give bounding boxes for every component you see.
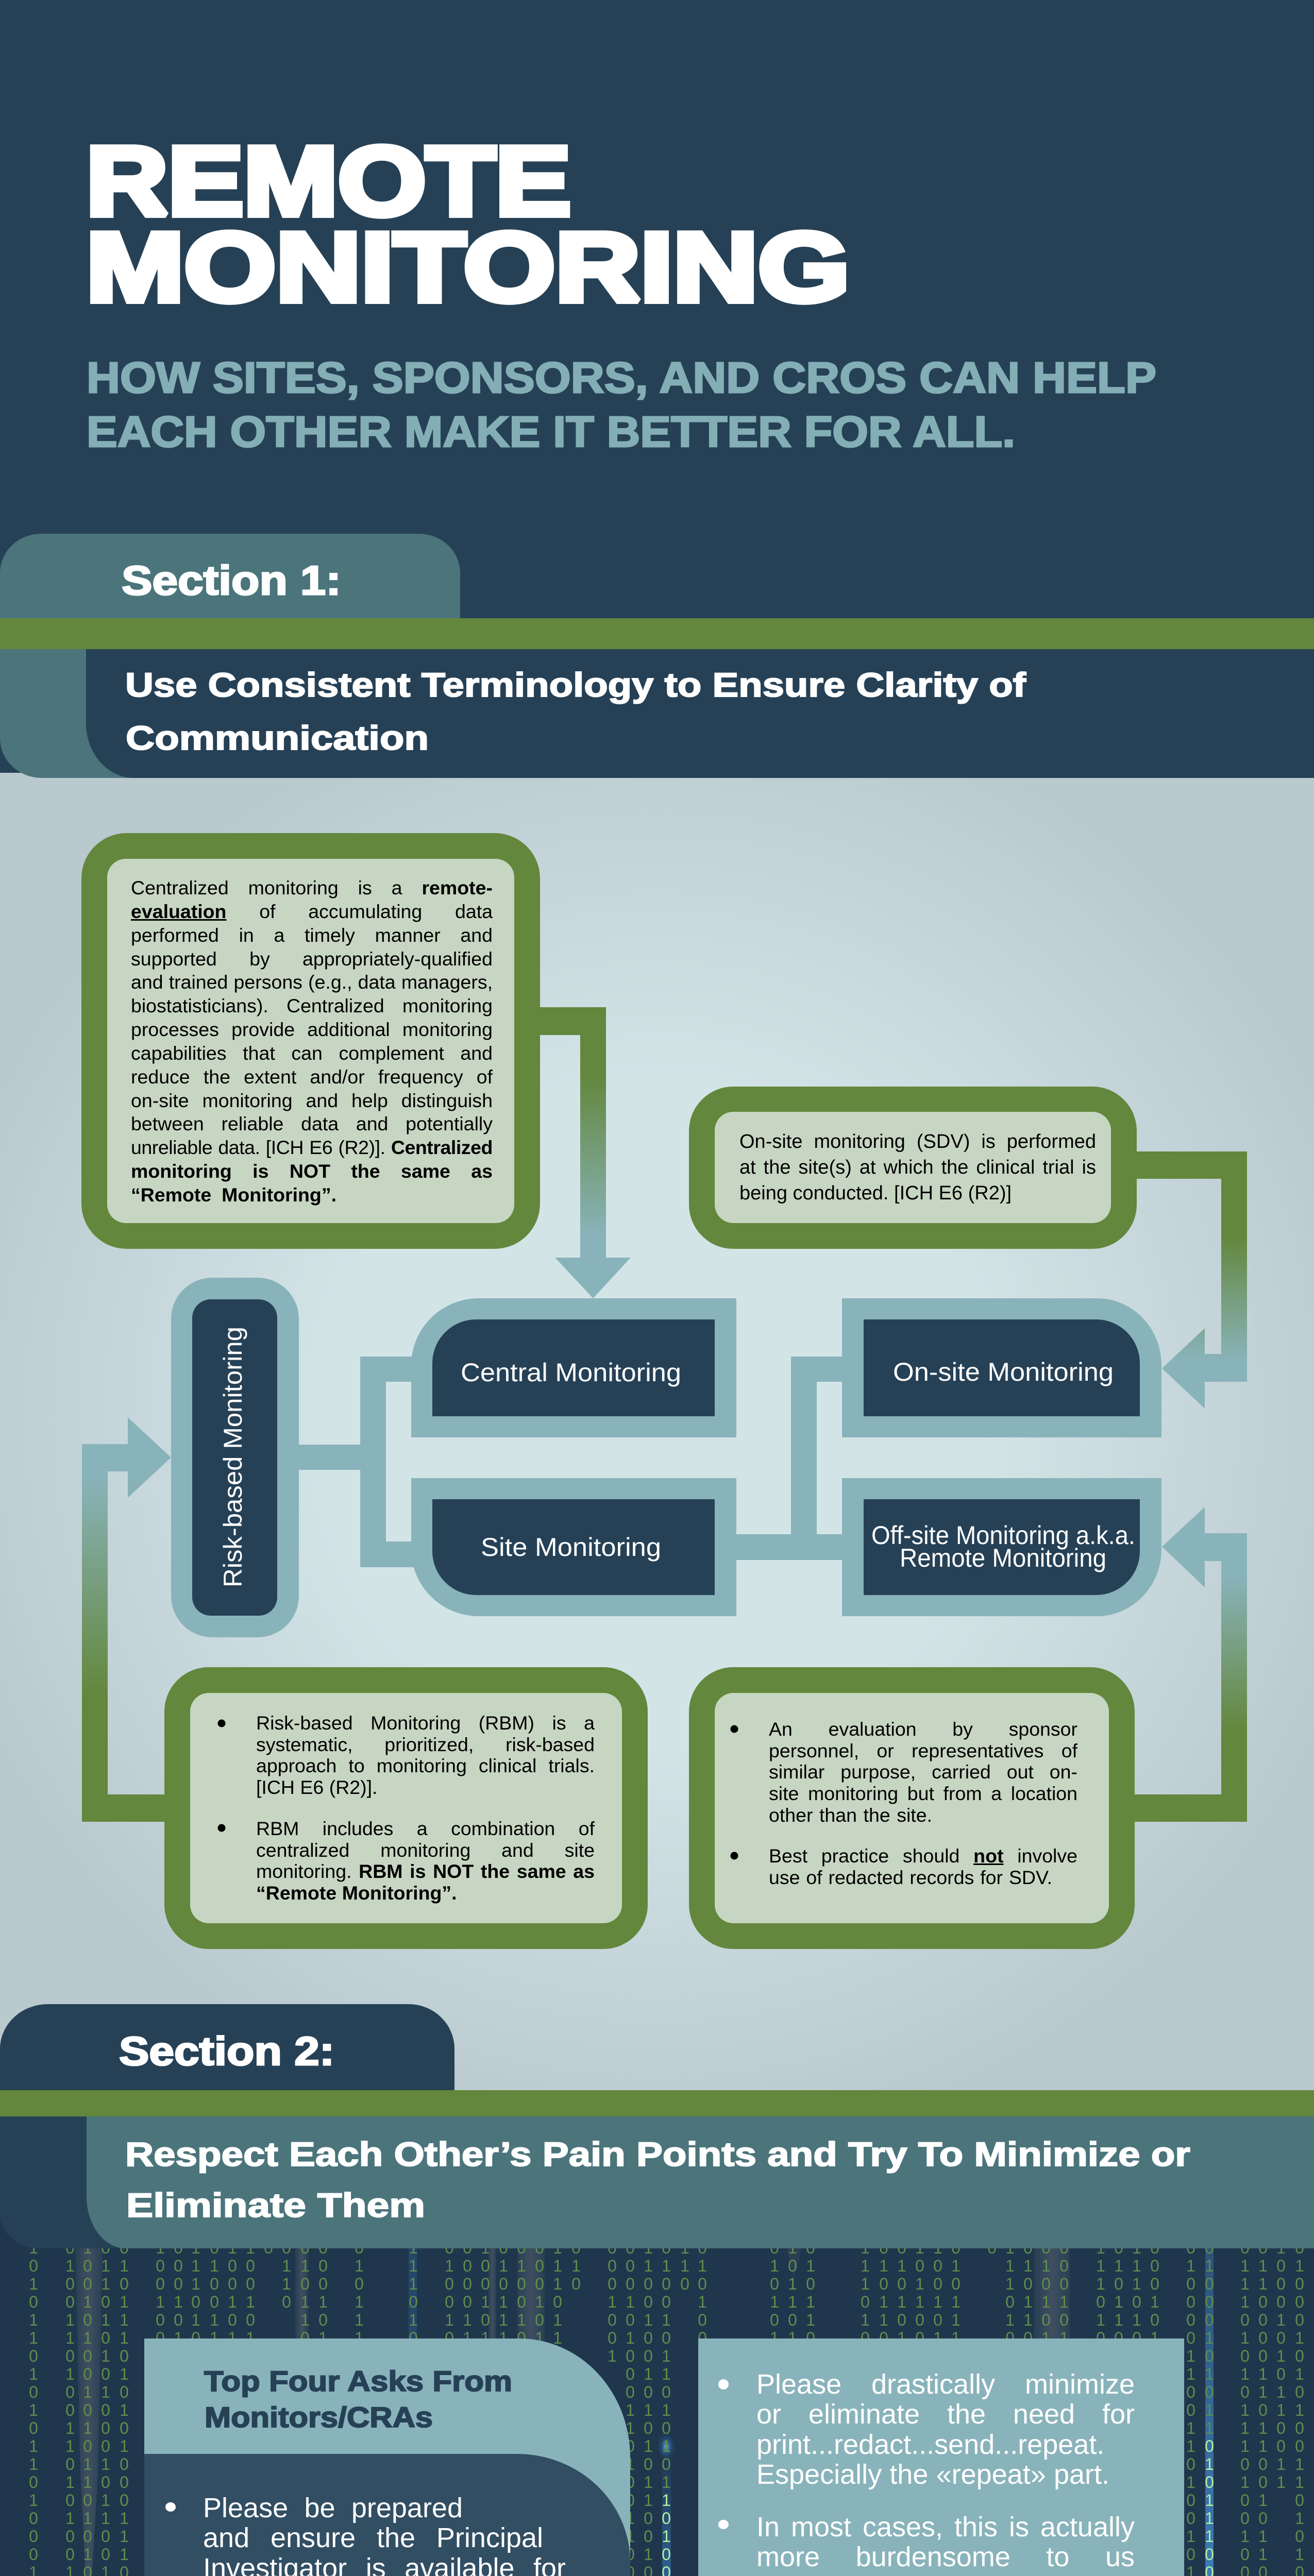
section 1 heading panel (86, 649, 1314, 778)
binary matrix background: 1011001 (915, 2239, 924, 2365)
binary matrix background: 0001010001101001100 (626, 2239, 635, 2576)
connector lines: left tree (296, 1357, 417, 1567)
panel: off-site monitoring definition: other than the site. (769, 1804, 932, 1826)
node: central monitoring (411, 1298, 736, 1437)
panel: centralized monitoring definition: biostatisticians). Centralized monitoring (131, 995, 493, 1016)
panel: centralized monitoring definition: supported by appropriately-qualified (131, 948, 493, 970)
section 1 header (0, 534, 1314, 778)
panel: centralized monitoring definition: processes provide additional monitoring (131, 1019, 493, 1040)
binary matrix background: 0001010 (1059, 2239, 1069, 2365)
node: on-site monitoring: On-site Monitoring (893, 1358, 1114, 1386)
binary matrix background: 0 (987, 2239, 997, 2257)
arrow: centralized note to central monitoring (536, 1007, 631, 1298)
node: site monitoring: Site Monitoring (481, 1533, 661, 1562)
node: on-site monitoring (842, 1298, 1161, 1437)
monitors card body (144, 2454, 630, 2576)
section 1 divider bar (0, 618, 1314, 649)
binary matrix background: 010 (571, 2239, 581, 2293)
binary matrix background: 1001011 (228, 2239, 237, 2365)
node: off-site monitoring: Off-site Monitoring a.k.a. (871, 1521, 1135, 1550)
binary matrix background: 0101101 (1023, 2239, 1033, 2365)
node: off-site monitoring: Remote Monitoring (900, 1544, 1106, 1572)
binary matrix background: 1001010010101101010 (83, 2239, 92, 2576)
sites list text: print...redact...send...repeat. (756, 2429, 1104, 2460)
binary matrix background: 01001011010101 (662, 2239, 671, 2492)
binary matrix background: 0100101 (517, 2239, 526, 2365)
monitors list text: Please be prepared (203, 2493, 463, 2523)
panel: top four asks from monitors (144, 2338, 630, 2576)
panel: centralized monitoring definition: “Remote Monitoring”. (131, 1184, 336, 1206)
binary matrix background: 0101110 (499, 2239, 508, 2365)
binary matrix background: 1110110 (553, 2239, 562, 2365)
monitors bullet marks (165, 2502, 176, 2576)
panel: off-site monitoring definition: personnel, or representatives of (769, 1740, 1077, 1761)
monitors list text: and ensure the Principal (203, 2522, 543, 2553)
section 2 divider bar (0, 2090, 1314, 2116)
title: REMOTE (86, 127, 571, 236)
node: risk-based monitoring (171, 1278, 299, 1637)
binary matrix background: 0001011 (535, 2239, 544, 2365)
panel: risk-based monitoring definition: “Remote Monitoring”. (256, 1882, 457, 1904)
section 2 heading: Respect Each Other’s Pain Points and Try To Minimize or (125, 2135, 1190, 2173)
panel: centralized monitoring definition (81, 833, 540, 1249)
section 2 heading: Eliminate Them (126, 2186, 425, 2224)
arrow: on-site note to on-site monitoring (1133, 1151, 1247, 1409)
node: central monitoring: Central Monitoring (461, 1358, 681, 1387)
binary matrix background: 1110101 (191, 2239, 200, 2365)
subtitle: HOW SITES, SPONSORS, AND CROS CAN HELP (87, 353, 1156, 402)
monitors card heading: Monitors/CRAs (205, 2401, 433, 2433)
binary matrix background: 0101101 (1114, 2239, 1123, 2365)
sites list text: or eliminate the need for (756, 2399, 1135, 2430)
binary matrix background: 1001011 (481, 2239, 490, 2365)
node: risk-based monitoring: Risk-based Monitoring (218, 1327, 247, 1587)
panel: on-site monitoring definition: being conducted. [ICH E6 (R2)] (739, 1182, 1012, 1204)
binary matrix background: 0100101 (445, 2239, 454, 2365)
binary matrix background: 0001010 (174, 2239, 183, 2365)
title: MONITORING (86, 213, 850, 322)
section 1 label: Section 1: (122, 557, 341, 603)
panel: risk-based monitoring definition: Risk-based Monitoring (RBM) is a (256, 1713, 595, 1734)
sites list text: Especially the «repeat» part. (756, 2459, 1109, 2490)
top banner background (0, 0, 1314, 788)
node: site monitoring (411, 1478, 736, 1616)
monitors card heading: Top Four Asks From (204, 2365, 512, 2397)
panel: risk-based monitoring definition: [ICH E6 (R2)]. (256, 1776, 377, 1798)
binary matrix background: 0101101 (806, 2239, 815, 2365)
panel: risk-based monitoring definition (164, 1667, 648, 1949)
binary matrix background: 0 (264, 2239, 273, 2257)
panel: centralized monitoring definition: reduce the extent and/or frequency of (131, 1066, 493, 1088)
binary matrix background: 0101010 (770, 2239, 779, 2365)
sites list text: more burdensome to us (756, 2541, 1135, 2572)
binary matrix background: 0101010 (897, 2239, 906, 2365)
section 1 tab (0, 534, 460, 618)
binary matrix background: 1110101 (861, 2239, 870, 2365)
panel: centralized monitoring definition: evaluation of accumulating data (131, 901, 493, 922)
binary matrix background: 0101110 (951, 2239, 961, 2365)
section 1 heading: Use Consistent Terminology to Ensure Clarity of (125, 666, 1026, 704)
panel: off-site monitoring definition: An evaluation by sponsor (769, 1719, 1077, 1740)
node: off-site monitoring (842, 1478, 1161, 1616)
sites bullet marks (718, 2379, 729, 2576)
section 1 diagram backdrop (0, 773, 1314, 2123)
binary matrix background: 01000101011 (1205, 2239, 1214, 2437)
panel: centralized monitoring definition: capabilities that can complement and (131, 1042, 493, 1064)
binary matrix background: 10001010110011 (1276, 2239, 1286, 2492)
binary matrix background: 0101010 (1041, 2239, 1051, 2365)
panel: centralized monitoring definition: on-site monitoring and help distinguish (131, 1090, 493, 1111)
panel: risk-based monitoring definition: centralized monitoring and site (256, 1839, 595, 1861)
section 1 teal backing (0, 649, 206, 778)
binary matrix background: 1001010 (246, 2239, 255, 2365)
arrow: off-site note to off-site monitoring (1131, 1507, 1247, 1822)
binary matrix background: 010100101 (698, 2239, 707, 2401)
panel: off-site monitoring definition: use of redacted records for SDV. (769, 1867, 1052, 1888)
panel: risk-based monitoring definition: RBM includes a combination of (256, 1818, 595, 1839)
binary matrix background: 0110 (282, 2239, 291, 2311)
binary matrix background: 0001010 (1150, 2239, 1159, 2365)
panel: centralized monitoring definition: performed in a timely manner and (131, 924, 493, 946)
panel: on-site monitoring definition: On-site monitoring (SDV) is performed (739, 1131, 1096, 1153)
subtitle: EACH OTHER MAKE IT BETTER FOR ALL. (87, 408, 1015, 456)
panel: risk-based monitoring definition: approach to monitoring clinical trials. (256, 1755, 595, 1776)
binary matrix background: 0101100 (879, 2239, 888, 2365)
sites list text: Please drastically minimize (756, 2369, 1135, 2400)
binary matrix background: 1110101 (1096, 2239, 1105, 2365)
panel: top four asks from sites (698, 2338, 1184, 2576)
section 2 tab (0, 2004, 454, 2090)
binary matrix background: 100100 (156, 2239, 165, 2347)
binary matrix background: 0000110 (463, 2239, 472, 2365)
panel: centralized monitoring definition: between reliable data and potentially (131, 1113, 493, 1134)
panel: off-site monitoring definition: site monitoring but from a location (769, 1783, 1077, 1804)
title (86, 127, 850, 322)
panel: centralized monitoring definition: and trained persons (e.g., data managers, (131, 971, 493, 993)
panel: risk-based monitoring definition: monitoring. RBM is NOT the same as (256, 1860, 595, 1882)
sites list text (756, 2369, 1148, 2576)
section 2 dark backing (0, 2116, 206, 2248)
binary matrix background: 110 (680, 2239, 689, 2293)
panel: off-site monitoring definition (689, 1667, 1135, 1949)
panel: on-site monitoring definition: at the site(s) at which the clinical trial is (739, 1157, 1096, 1178)
monitors list text (203, 2493, 595, 2576)
section 2 label: Section 2: (119, 2028, 334, 2074)
binary matrix background: 0101100 (300, 2239, 310, 2365)
binary matrix background: 0001001 (608, 2239, 617, 2365)
binary matrix background: 1110101 (1132, 2239, 1141, 2365)
panel: centralized monitoring definition: unreliable data. [ICH E6 (R2)]. Centralized (131, 1137, 493, 1158)
binary matrix background: 0101110 (355, 2239, 364, 2365)
binary matrix background: 0001010 (318, 2239, 328, 2365)
arrow: RBM note to risk-based monitoring (82, 1417, 171, 1822)
panel: centralized monitoring definition: Centralized monitoring is a remote- (131, 877, 493, 899)
panel: off-site monitoring definition: similar purpose, carried out on- (769, 1761, 1077, 1783)
binary matrix background: 1011010 (788, 2239, 797, 2365)
subtitle (87, 353, 1156, 456)
section 2 heading panel (87, 2116, 1314, 2248)
panel: centralized monitoring definition: monitoring is NOT the same as (131, 1160, 493, 1182)
section 2 header (0, 2004, 1314, 2248)
sites card body (698, 2338, 1184, 2576)
section 1 heading: Communication (126, 719, 429, 757)
section 1 heading (125, 666, 1026, 757)
binary matrix background: 0100110 (210, 2239, 219, 2365)
panel: risk-based monitoring definition: systematic, prioritized, risk-based (256, 1734, 595, 1755)
section 2 heading (125, 2135, 1190, 2224)
connector lines: right tree (732, 1357, 845, 1560)
binary matrix background: 1001011 (933, 2239, 942, 2365)
monitors card header shape (144, 2338, 630, 2568)
binary matrix background: 1110101 (409, 2239, 418, 2365)
panel: off-site monitoring definition: Best practice should not involve (769, 1845, 1077, 1867)
sites list text: In most cases, this is actually (756, 2512, 1135, 2543)
binary matrix background: 1110101 (1005, 2239, 1015, 2365)
panel: on-site monitoring definition (689, 1087, 1137, 1249)
binary matrix background (0, 2215, 1314, 2576)
monitors card heading (204, 2365, 512, 2433)
